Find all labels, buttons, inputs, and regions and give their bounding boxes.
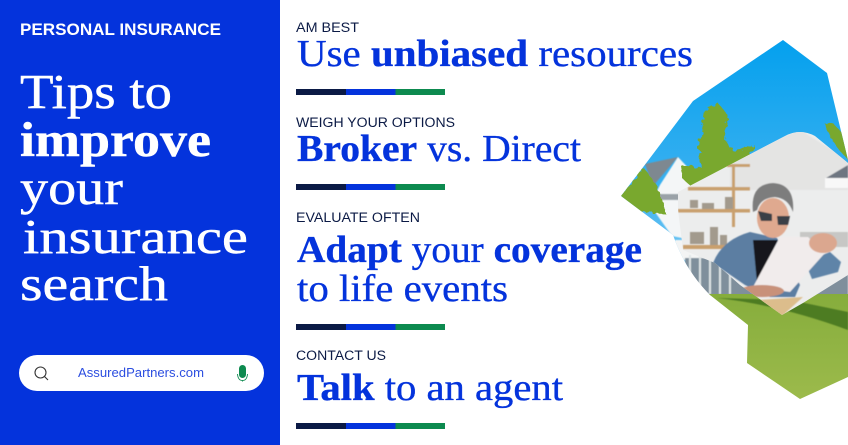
label: EVALUATE OFTEN	[296, 210, 420, 225]
icon: microphone	[238, 365, 248, 382]
sidebar title: insurance	[23, 209, 248, 264]
woman: face	[757, 198, 789, 238]
kitchen shelves	[678, 164, 750, 249]
woman: document	[753, 237, 825, 292]
tricolour bar	[296, 89, 445, 95]
fence	[675, 240, 848, 295]
search bar url: AssuredPartners.com	[78, 365, 204, 380]
photo: house, garden and woman reading a document	[610, 30, 848, 404]
sidebar title	[20, 64, 248, 311]
label: WEIGH YOUR OPTIONS	[296, 115, 455, 130]
sidebar title: search	[20, 256, 168, 311]
heading: Use unbiased resources	[297, 33, 693, 75]
woman: hair	[753, 183, 793, 212]
icon: magnifying glass	[35, 367, 48, 380]
tricolour bar	[296, 184, 445, 190]
heading: Talk to an agent	[297, 367, 563, 409]
panel: blue sidebar	[0, 0, 280, 445]
lawn	[709, 294, 848, 399]
lawn shadow	[717, 298, 848, 330]
table	[758, 297, 803, 316]
woman: glasses	[758, 211, 790, 225]
item: talk to an agent	[296, 348, 563, 429]
item: broker vs direct	[296, 115, 581, 190]
sidebar kicker: PERSONAL INSURANCE	[20, 21, 221, 39]
heading line 2: to life events	[297, 268, 508, 310]
woman: right sleeve	[805, 252, 841, 279]
search bar	[19, 355, 264, 391]
sidebar title: your	[20, 160, 123, 215]
back wall top	[730, 130, 848, 190]
sidebar title: improve	[20, 112, 211, 167]
item: adapt your coverage	[296, 210, 642, 330]
woman: hands	[809, 233, 837, 253]
item: use unbiased resources	[296, 20, 693, 95]
tricolour bar	[296, 324, 445, 330]
trees	[621, 102, 848, 213]
woman: denim jacket	[713, 232, 800, 297]
tricolour bar	[296, 423, 445, 429]
house	[645, 157, 692, 240]
sidebar title: Tips to	[20, 64, 172, 119]
label: CONTACT US	[296, 348, 386, 363]
heading line 1: Adapt your coverage	[297, 229, 642, 271]
woman: black top	[753, 240, 778, 283]
label: AM BEST	[296, 20, 359, 35]
heading: Broker vs. Direct	[297, 128, 581, 170]
